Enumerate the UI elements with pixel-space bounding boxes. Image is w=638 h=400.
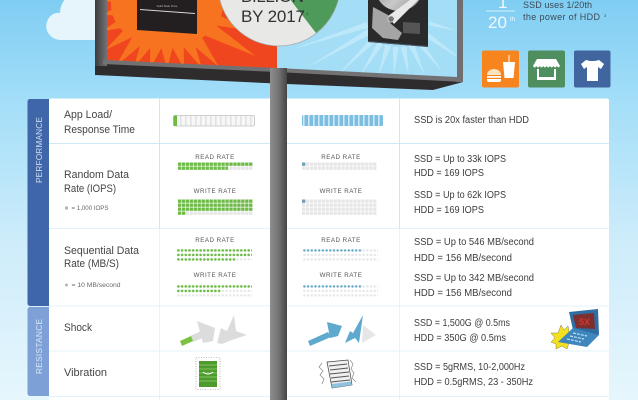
icon: laptop shock 5X: 5X (579, 317, 590, 327)
comparison values: HDD = 0.5gRMS, 23 - 350Hz (414, 377, 533, 388)
icon: laptop shock 5X (551, 309, 599, 349)
icon: t-shirt (574, 50, 610, 88)
HDD drive image (368, 0, 428, 47)
comparison values: HDD = 169 IOPS (414, 168, 484, 179)
SSD load bar (174, 116, 254, 126)
market size pie chart (218, 0, 340, 46)
comparison values: SSD = Up to 62k IOPS (414, 190, 506, 201)
HDD random read chart: READ RATE (321, 154, 361, 161)
power fact text: 3 (604, 13, 607, 18)
comparison values: SSD = Up to 33k IOPS (414, 154, 506, 165)
SSD sequential write chart: WRITE RATE (194, 272, 236, 279)
HDD load bar (302, 115, 383, 126)
HDD sequential write chart (303, 272, 378, 298)
SSD drive image (137, 0, 197, 34)
row labels: Response Time (64, 124, 135, 136)
cloud left (46, 0, 100, 40)
one twentieth fraction: 20 (488, 13, 507, 32)
comparison values: HDD = 156 MB/second (414, 288, 512, 299)
sidebar: resistance (28, 307, 49, 396)
icon: storefront (528, 50, 565, 88)
HDD random write chart (302, 188, 377, 216)
icon: HDD hammer shock (308, 315, 376, 346)
HDD sequential read chart: READ RATE (321, 237, 361, 244)
row labels: Sequential Data (64, 245, 140, 257)
one twentieth fraction (486, 0, 515, 32)
SSD random read chart: READ RATE (195, 154, 235, 161)
comparison values: HDD = 169 IOPS (414, 205, 484, 216)
power fact (486, 0, 607, 32)
SSD sequential read chart (177, 237, 252, 262)
SSD drive image: Solid State Drive (157, 4, 178, 8)
table panel (49, 98, 609, 400)
HDD sequential write chart: WRITE RATE (320, 272, 362, 279)
row labels (64, 109, 140, 379)
comparison values: HDD = 350G @ 0.5ms (414, 333, 506, 344)
HDD random write chart: WRITE RATE (320, 188, 362, 195)
power fact text: SSD uses 1/20th (523, 0, 592, 10)
row labels: Random Data (64, 169, 130, 181)
billboard left frame (95, 0, 107, 66)
sidebar: performance (28, 99, 49, 306)
SSD sequential read chart: READ RATE (195, 237, 235, 244)
SSD random write chart: WRITE RATE (194, 188, 236, 195)
comparison values: SSD is 20x faster than HDD (414, 115, 529, 126)
power fact text (523, 0, 607, 22)
billboard lower lip (103, 59, 463, 82)
sidebar: performance: PERFORMANCE (34, 117, 44, 183)
comparison values: SSD = 1,500G @ 0.5ms (414, 318, 510, 329)
SSD sequential write chart (177, 272, 252, 298)
icon: SSD vibration (196, 358, 220, 390)
billboard right frame (456, 0, 463, 82)
HDD random read chart (302, 154, 377, 170)
power fact text: the power of HDD (523, 12, 600, 22)
icon: SSD hammer shock (180, 315, 247, 346)
row labels: Shock (64, 322, 92, 334)
comparison values (414, 115, 534, 388)
billboard underside (95, 0, 463, 90)
row labels: Vibration (64, 367, 107, 379)
row labels: Rate (MB/S) (64, 258, 119, 270)
sidebar: resistance: RESISTANCE (34, 319, 44, 374)
billboard pole (270, 68, 287, 400)
comparison values: HDD = 156 MB/second (414, 253, 512, 264)
row labels: Rate (IOPS) (64, 183, 116, 195)
orange SSD panel (107, 0, 277, 68)
market size pie chart: BY 2017 (241, 7, 305, 26)
row labels: = 1,000 IOPS (72, 206, 108, 212)
market size pie chart: 4 (306, 12, 309, 18)
billboard (95, 0, 465, 90)
SSD random read chart (178, 154, 253, 170)
comparison values: SSD = Up to 546 MB/second (414, 237, 534, 248)
comparison values: SSD = 5gRMS, 10-2,000Hz (414, 362, 525, 373)
SSD random write chart (178, 188, 253, 216)
blue HDD panel (277, 0, 465, 80)
HDD sequential read chart (303, 237, 378, 262)
one twentieth fraction: th (510, 17, 515, 23)
comparison values: SSD = Up to 342 MB/second (414, 273, 534, 284)
row labels: App Load/ (64, 109, 113, 121)
icon: HDD vibration (319, 360, 356, 388)
comparison table (28, 98, 609, 400)
icon: food and drink (482, 50, 519, 88)
row labels: = 10 MB/second (72, 283, 120, 289)
